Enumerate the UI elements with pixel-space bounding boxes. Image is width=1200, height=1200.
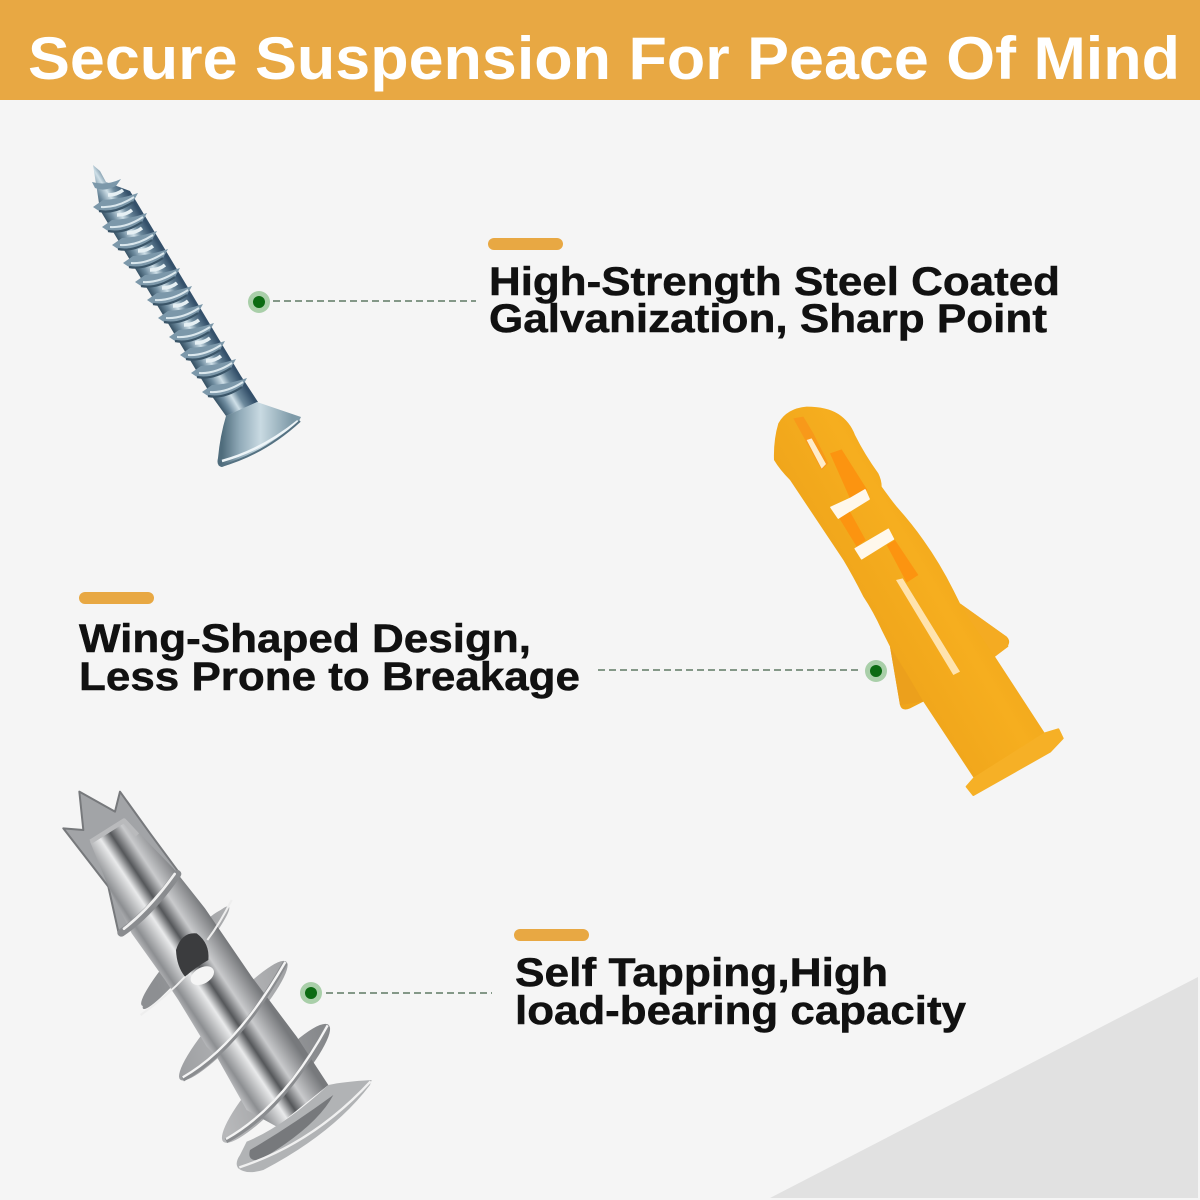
icon: yellow plastic anchor bbox=[774, 407, 1063, 795]
text block: load-bearing capacity bbox=[515, 989, 967, 1033]
text block: High-Strength Steel Coated bbox=[489, 260, 1060, 304]
marker dot bbox=[865, 660, 887, 682]
text block bbox=[79, 617, 580, 699]
text block bbox=[489, 260, 1060, 341]
text block: Less Prone to Breakage bbox=[79, 655, 580, 699]
text block bbox=[515, 951, 967, 1033]
icon: metal self-tapping anchor bbox=[63, 792, 372, 1172]
title banner bbox=[0, 0, 1200, 100]
text block: Self Tapping,High bbox=[515, 951, 888, 995]
text block: Galvanization, Sharp Point bbox=[489, 297, 1047, 341]
text block: Wing-Shaped Design, bbox=[79, 617, 531, 661]
callout: plastic anchor bbox=[79, 592, 887, 699]
title: Secure Suspension For Peace Of Mind bbox=[28, 25, 1180, 92]
icon: galvanized screw bbox=[92, 165, 301, 467]
callout: screw bbox=[248, 238, 1060, 341]
callout: metal anchor bbox=[300, 929, 967, 1033]
marker dot bbox=[300, 982, 322, 1004]
marker dot bbox=[248, 291, 270, 313]
